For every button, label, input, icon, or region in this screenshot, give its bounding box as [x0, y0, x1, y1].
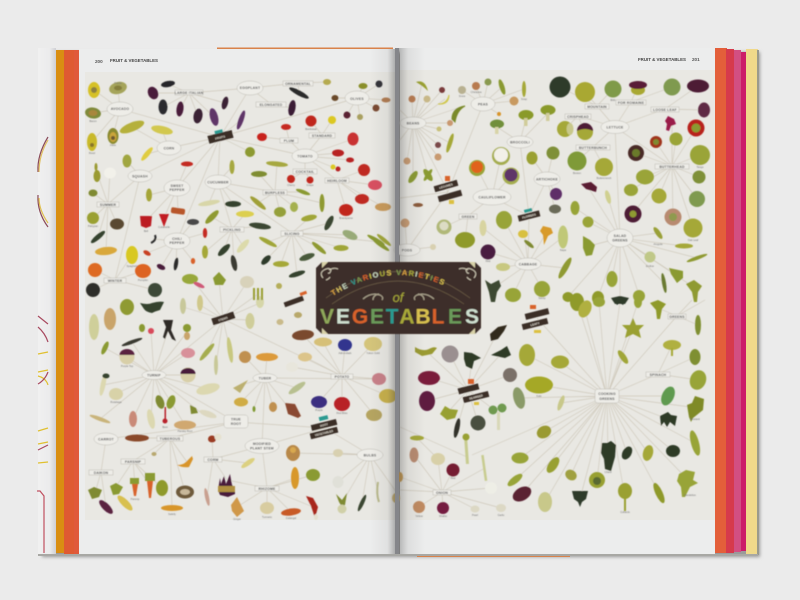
hub: salad greens: SALAD — [614, 234, 627, 238]
fruit items: avocados — [84, 80, 128, 155]
word vegetables: E — [370, 306, 384, 328]
fruit items: corn and squash: Spaghetti — [127, 264, 138, 268]
hub: romaine: FOR ROMAINE — [618, 101, 645, 105]
root items: squash, stems and turnips: Purple Top — [121, 364, 134, 368]
fruit items: corn and squash: Pattypan — [88, 224, 99, 228]
page header left: FRUIT & VEGETABLES — [110, 58, 158, 63]
hub: eggplant — [237, 81, 263, 95]
hub: parsnip — [121, 459, 145, 464]
hub: tuberous: TUBEROUS — [160, 437, 181, 441]
hub: cocktail: COCKTAIL — [296, 170, 314, 174]
fruit items: corn and squash — [86, 118, 174, 297]
banner: root vegetables: ROOT — [320, 422, 329, 428]
fruit items: avocados: Reed — [89, 151, 96, 155]
fruit items: avocados: Bacon — [89, 119, 97, 123]
hub: cocktail — [293, 169, 317, 174]
root items: tubers and potatoes: Purple — [315, 408, 323, 412]
word of: of — [393, 290, 405, 305]
hub: green: GREEN — [461, 215, 475, 219]
cooking greens items: Dandelion — [684, 493, 696, 497]
arc decorations — [326, 272, 470, 304]
seaweed and onion items: Yellow — [415, 514, 423, 518]
hub: cabbage — [515, 258, 541, 270]
lettuce items: Tango — [696, 165, 704, 169]
hub: broccoli: BROCCOLI — [510, 140, 530, 144]
lettuce items: Bibb — [610, 98, 616, 102]
fruit items: olives — [332, 80, 390, 120]
fruit items: peppers — [140, 162, 207, 271]
left coloured tab stripes — [56, 50, 80, 555]
hub: modified plant stem — [245, 438, 279, 454]
cooking greens items: Collards — [620, 510, 630, 514]
brassica items — [436, 105, 574, 302]
banner: stalks and flowers — [211, 311, 235, 325]
hub: peas: PEAS — [478, 102, 489, 106]
fruit items: tomatoes — [245, 116, 391, 220]
hub: butterhead: BUTTERHEAD — [659, 165, 685, 169]
cooking greens items: Mustard — [690, 417, 700, 421]
hub: tomato: TOMATO — [297, 154, 313, 158]
hub: scallop — [97, 202, 119, 207]
hub: salad greens: GREENS — [612, 238, 628, 242]
hub: cooking greens — [595, 389, 619, 403]
hub: plum — [280, 138, 298, 143]
hub: rhizome — [255, 486, 279, 491]
left page edge with section colours — [37, 48, 56, 555]
flourishes beside of — [363, 294, 434, 300]
lettuce items: Buttercrunch — [597, 176, 612, 180]
hub: lettuce: LETTUCE — [606, 126, 624, 130]
hub: peas — [471, 97, 495, 111]
hub: sweet pepper: PEPPER — [170, 188, 185, 192]
hub: cauliflower: CAULIFLOWER — [478, 196, 506, 200]
root items: carrots, tuberous roots and rhizomes: Salsify — [168, 512, 177, 516]
hub: green — [459, 214, 477, 219]
hub: chili pepper: PEPPER — [170, 241, 185, 245]
hub: tomato — [292, 149, 318, 163]
lettuce items: Oak Leaf — [688, 238, 699, 242]
hub: ornamental — [283, 81, 313, 86]
word vegetables: V — [320, 306, 334, 328]
hub: corn: CORN — [164, 146, 175, 150]
lettuce items: Boston — [573, 171, 582, 175]
hub: sweet pepper — [164, 180, 190, 196]
hub: slicing: SLICING — [284, 232, 300, 236]
root items: tubers and potatoes — [233, 329, 397, 421]
salad greens items — [562, 182, 708, 305]
cooking greens items: Chard — [604, 470, 612, 474]
hub: beans — [400, 117, 426, 129]
hub: slicing — [281, 231, 303, 236]
root items: carrots, tuberous roots and rhizomes: Ginger — [233, 517, 241, 521]
brassica items: Napa — [560, 248, 567, 252]
hub: crispheads: CRISPHEAD — [567, 115, 589, 119]
legume items: Snap — [521, 97, 528, 101]
hub: lettuce — [601, 120, 629, 134]
seaweed and onion items: Shallot — [439, 514, 447, 518]
arc title text: THE VARIOUS VARIETIES — [330, 269, 446, 296]
hub: daikon — [89, 470, 113, 475]
word vegetables: A — [399, 306, 415, 328]
vegetable chart — [84, 76, 710, 521]
hub: large italian: LARGE ITALIAN — [175, 91, 204, 95]
banner: flower vegetables — [518, 208, 540, 222]
hub: dose: PODS — [402, 248, 413, 252]
root items: tubers and potatoes: Adirondack — [339, 351, 352, 355]
hub: true root — [224, 415, 248, 428]
hub: pickling: PICKLING — [223, 228, 241, 232]
page header left — [95, 58, 158, 64]
hub: standard — [309, 133, 335, 138]
fruit items: tomatoes: Cherry — [287, 183, 296, 187]
hub: mountain — [585, 104, 609, 109]
connector lines left page — [92, 82, 397, 512]
hub: beans: BEANS — [407, 122, 420, 126]
seaweed and onion items: Pearl — [472, 513, 478, 517]
title panel — [315, 261, 482, 335]
fruit items: avocados: Hass — [110, 143, 117, 147]
hub: squash — [128, 170, 152, 182]
fruit items: tomatoes: Beefsteak — [305, 127, 317, 131]
banner: leaf vegetables upper — [522, 305, 549, 333]
hub: tuber — [253, 374, 277, 382]
hub: cauliflower — [473, 189, 511, 205]
fruit items: cucumbers — [198, 160, 392, 279]
seaweed and onion items: Red — [451, 476, 456, 480]
hub labels: legumes and brassicas — [394, 97, 689, 495]
page header right: FRUIT & VEGETABLES — [638, 57, 686, 62]
hub: elongated — [256, 102, 286, 107]
hub: true root: TRUE — [231, 418, 242, 422]
root items: carrots, tuberous roots and rhizomes: Galangal — [286, 516, 297, 520]
page header right: 201 — [692, 57, 700, 62]
hub: corn — [157, 141, 181, 155]
fruit items: corn and squash: Pumpkin — [138, 278, 149, 282]
banner: top flower vegetables — [284, 291, 307, 307]
salad greens items: Arugula — [654, 242, 663, 246]
word vegetables: L — [432, 306, 445, 328]
hub: cucumber — [205, 175, 231, 189]
fruit items: peppers: Bell — [144, 229, 149, 233]
hub: artichoke — [534, 172, 560, 186]
top and bottom orange cover edges — [217, 48, 570, 557]
banner: root vegetables — [310, 415, 338, 439]
hub: bulbs — [357, 449, 383, 461]
word vegetables: E — [448, 306, 462, 328]
hub: cooking greens: GREENS — [599, 397, 615, 401]
legume items: Chickpea — [471, 90, 482, 94]
hub: tuber: TUBER — [259, 376, 272, 380]
salad greens items: Endive — [646, 264, 655, 268]
hub: modified plant stem: PLANT STEM — [250, 446, 274, 450]
hub: daikon: DAIKON — [94, 471, 109, 475]
corner ornaments — [321, 268, 476, 280]
hub: cabbage: CABBAGE — [519, 262, 538, 266]
root items: carrots, tuberous roots and rhizomes — [88, 434, 400, 521]
fruit items: avocados: Fuerte — [114, 81, 122, 85]
right coloured tab stripes — [715, 48, 759, 556]
hub: burpless: BURPLESS — [265, 191, 286, 195]
hub: potato: POTATO — [335, 375, 350, 379]
word vegetables: S — [465, 306, 479, 328]
page header left: 200 — [95, 59, 103, 64]
hub: carrot: CARROT — [98, 438, 115, 442]
seaweed and onion items — [397, 346, 517, 518]
hub: olives — [345, 91, 369, 105]
word vegetables: B — [415, 306, 431, 328]
right page — [400, 48, 715, 555]
hub: eggplant: EGGPLANT — [240, 86, 261, 90]
fruit items: tomatoes: Grape — [306, 183, 314, 187]
hub labels: fruits — [97, 81, 369, 283]
hub: greens: GREENS — [669, 315, 685, 319]
hub: cucumber: CUCUMBER — [207, 180, 229, 184]
hub: scallop: SUMMER — [100, 203, 116, 207]
banner: flower vegetables: FLOWERS — [522, 212, 536, 220]
root items: squash, stems and turnips: Rutabaga — [110, 400, 122, 404]
hub: dose — [394, 244, 420, 256]
hub: butterhead — [655, 164, 689, 169]
hub: mountain: MOUNTAIN — [587, 105, 607, 109]
hub: butterbunch: BUTTERBUNCH — [579, 146, 607, 150]
banner: legumes — [434, 176, 462, 204]
hub: loose leaf — [651, 107, 679, 112]
book shadow — [42, 52, 760, 557]
lettuce items — [550, 76, 710, 242]
brassica items: Red — [486, 259, 491, 263]
hub: artichoke: ARTICHOKE — [536, 178, 559, 182]
connector lines right page — [400, 82, 705, 509]
brassica items: Savoy — [538, 296, 546, 300]
hub: standard: STANDARD — [312, 134, 333, 138]
hub labels: roots — [89, 370, 383, 491]
banner: root vegetables: VEGETABLES — [314, 429, 334, 437]
hub: onion: ONION — [436, 491, 448, 495]
hub: onion — [433, 490, 451, 495]
banner: leaf vegetables upper: LEAFY — [530, 321, 540, 327]
hub: tuberous — [157, 436, 183, 441]
hub: bulbs: BULBS — [364, 454, 377, 458]
hub: pickling — [220, 227, 244, 232]
hub: heirloom: HEIRLOOM — [327, 179, 347, 183]
central node: fruits banner — [207, 129, 234, 144]
root items: carrots, tuberous roots and rhizomes: Parsnip — [131, 497, 140, 501]
hub: potato — [331, 374, 353, 379]
hub: greens — [668, 314, 686, 319]
spine shading — [38, 48, 758, 556]
seaweed and onion items: Garlic — [498, 513, 505, 517]
root items: squash, stems and turnips: Beet — [162, 425, 168, 429]
word vegetables: E — [336, 306, 350, 328]
hub: winter squash — [104, 278, 126, 283]
banner: leaf vegetables lower: SEAWEED — [469, 393, 483, 401]
hub: chili pepper — [164, 233, 190, 249]
root items: carrots, tuberous roots and rhizomes: Turmeric — [262, 515, 273, 519]
root items: tubers and potatoes: Yukon Gold — [366, 351, 380, 355]
root items: squash, stems and turnips: Parsley Root — [178, 429, 193, 433]
fruit items: peppers: Cubanelle — [158, 225, 170, 229]
hub: winter squash: WINTER — [108, 279, 123, 283]
hub: ornamental: ORNAMENTAL — [285, 82, 311, 86]
hub: carrot — [94, 433, 118, 445]
banner: stalks and flowers: STEMS — [218, 316, 228, 322]
hub: broccoli — [507, 136, 533, 148]
fruit items: tomatoes: Brandywine — [339, 216, 353, 220]
hub: squash: SQUASH — [132, 174, 148, 178]
root items: tubers and potatoes: Red Bliss — [337, 411, 348, 415]
hub: corm — [204, 457, 222, 462]
root items: squash, stems and turnips — [89, 272, 302, 433]
hub: turnip — [142, 370, 166, 380]
hub: crispheads — [565, 114, 591, 119]
hub: elongated: ELONGATED — [260, 103, 283, 107]
cooking greens items — [490, 293, 709, 514]
legume items — [400, 78, 528, 250]
hub: modified plant stem: MODIFIED — [253, 442, 271, 446]
cooking greens items: Kale — [536, 394, 542, 398]
hub: plum: PLUM — [284, 139, 294, 143]
central node: fruits banner: FRUITS — [215, 134, 226, 141]
hub: loose leaf: LOOSE LEAF — [653, 108, 677, 112]
hub: salad greens — [607, 229, 633, 247]
hub: butterbunch — [576, 145, 610, 150]
hub: olives: OLIVES — [350, 97, 364, 101]
hub: heirloom — [325, 178, 349, 183]
hub: burpless — [263, 190, 287, 195]
hub: true root: ROOT — [231, 422, 242, 426]
fruit items: eggplants — [146, 79, 331, 130]
hub: chili pepper: CHILI — [172, 237, 182, 241]
left page — [79, 49, 396, 555]
hub: sweet pepper: SWEET — [170, 184, 184, 188]
banner: legumes: LEGUMES — [439, 182, 453, 190]
word vegetables: T — [386, 306, 399, 328]
hub: avocado: AVOCADO — [111, 107, 129, 111]
word vegetables: G — [352, 306, 368, 328]
hub: spinach — [646, 372, 670, 377]
legume items: Snow — [459, 94, 465, 98]
hub: spinach: SPINACH — [650, 373, 667, 377]
hub: parsnip: PARSNIP — [125, 460, 142, 464]
hub: rhizome: RHIZOME — [258, 487, 276, 491]
hub: cooking greens: COOKING — [598, 392, 616, 396]
hub: turnip: TURNIP — [147, 374, 161, 378]
hub: corm: CORM — [207, 458, 219, 462]
banner: leaf vegetables lower — [458, 379, 489, 405]
hub: avocado — [107, 102, 133, 116]
